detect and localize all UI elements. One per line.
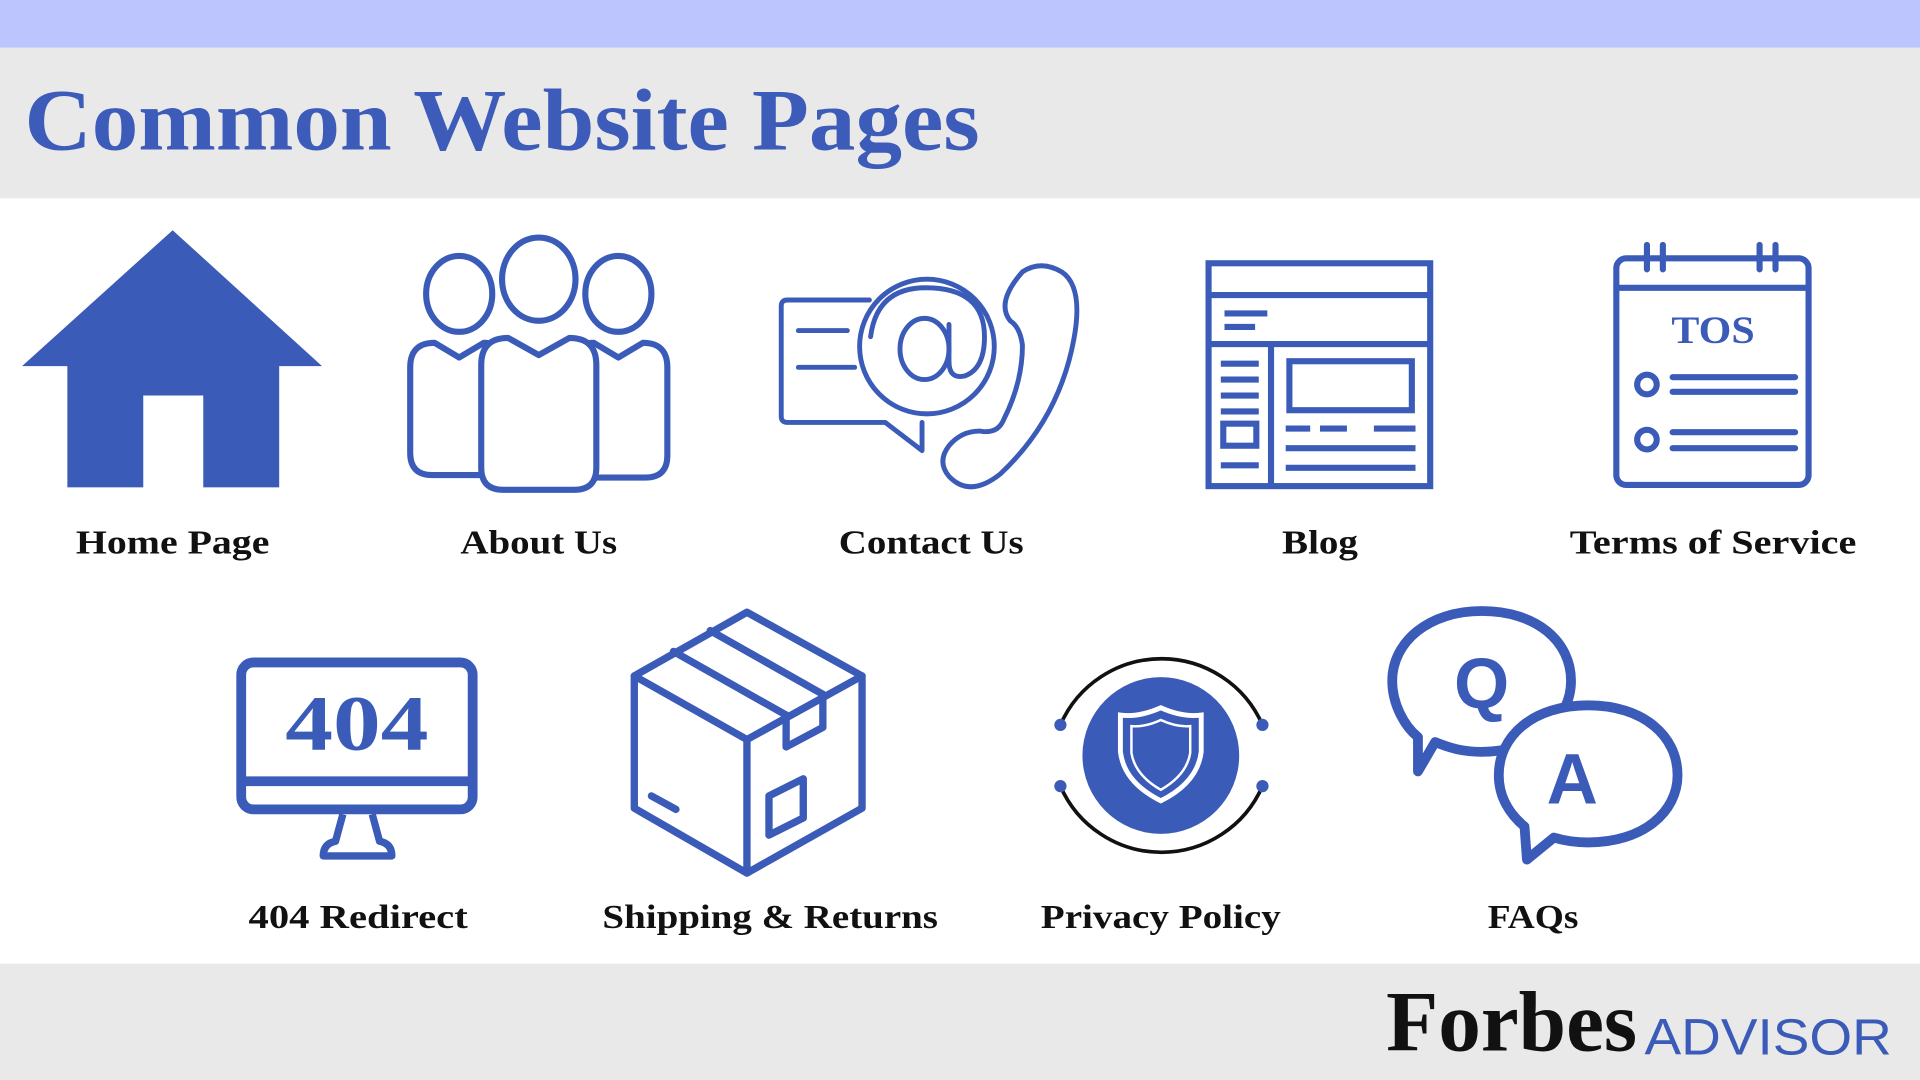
labels: Privacy Policy — [1041, 898, 1281, 936]
icon: box — [634, 612, 862, 873]
icon: faqs: A — [1547, 740, 1598, 819]
labels: 404 Redirect — [249, 898, 468, 936]
labels — [76, 523, 1856, 936]
labels: Shipping & Returns — [602, 898, 938, 936]
labels: Home Page — [76, 523, 269, 561]
logo: forbes advisor: ADVISOR — [1644, 1007, 1892, 1065]
title: Common Website Pages — [24, 71, 980, 169]
icon: contact — [781, 266, 1077, 487]
labels: FAQs — [1488, 898, 1578, 936]
labels: Blog — [1282, 523, 1358, 561]
logo: forbes advisor: Forbes — [1386, 975, 1637, 1070]
icon: faqs: Q — [1454, 645, 1509, 724]
icon: terms of service — [1616, 245, 1809, 485]
labels: Contact Us — [839, 523, 1024, 561]
labels: Terms of Service — [1570, 523, 1856, 561]
icon: 404: 404 — [285, 679, 429, 766]
icon: terms of service: TOS — [1671, 309, 1755, 352]
icon: faqs — [1392, 611, 1678, 860]
icon: blog — [1209, 263, 1430, 486]
labels: About Us — [460, 523, 617, 561]
logo: forbes advisor — [1386, 975, 1892, 1070]
icon: 404 — [241, 662, 473, 856]
icon: privacy — [1054, 659, 1269, 852]
icon: home — [22, 230, 322, 489]
icon: about us — [410, 238, 667, 490]
